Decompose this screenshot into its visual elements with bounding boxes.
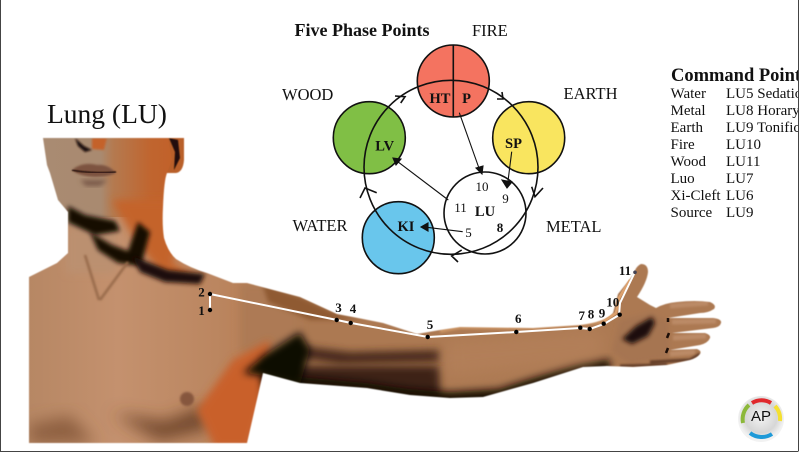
- wood circle: [333, 102, 405, 174]
- diagram heading: Five Phase Points: [294, 20, 430, 40]
- five phase diagram: [282, 20, 618, 274]
- table rows: LU11: [726, 154, 760, 170]
- armpit shadow: [243, 332, 310, 385]
- table rows: LU9: [726, 205, 754, 221]
- arrows between circles: [393, 113, 512, 232]
- lung point numbers: 9: [502, 191, 509, 206]
- face tone: [44, 138, 184, 217]
- body illustration: head, torso and arm: [20, 130, 733, 450]
- table rows: Source: [670, 205, 712, 221]
- lung point numbers: 11: [454, 200, 467, 215]
- title: Lung (LU): [47, 98, 167, 129]
- earth circle: [493, 102, 565, 174]
- table rows: Xi-Cleft: [670, 188, 721, 204]
- right frame mask: [798, 0, 800, 453]
- bold element labels: SP: [505, 136, 522, 152]
- ear: [170, 139, 184, 172]
- table rows: LU10: [726, 137, 761, 153]
- neck tone: [99, 234, 104, 237]
- table rows: [670, 86, 800, 221]
- lung point numbers: 10: [476, 179, 488, 194]
- nipple: [180, 392, 194, 406]
- meridian line with acupoints: 5: [427, 317, 434, 332]
- phase labels: WATER: [292, 216, 348, 235]
- meridian line with acupoints: 1: [198, 303, 205, 318]
- generating cycle ring with arrowheads: [360, 80, 543, 262]
- meridian line with acupoints: 2: [198, 284, 205, 300]
- meridian line with acupoints: [198, 263, 637, 339]
- phase labels: [282, 21, 618, 236]
- bold element labels: [375, 91, 522, 235]
- hand detail: [612, 303, 716, 366]
- meridian line with acupoints: 7: [578, 308, 585, 323]
- table rows: Earth: [670, 120, 703, 136]
- table rows: LU6: [726, 188, 754, 204]
- meridian line with acupoints: 4: [350, 301, 357, 316]
- fire circle: [417, 45, 489, 117]
- table rows: LU7: [726, 171, 754, 187]
- meridian line with acupoints: 6: [515, 311, 522, 326]
- table rows: LU8 Horary: [726, 103, 800, 119]
- command points table: [670, 66, 800, 221]
- bold element labels: LV: [375, 138, 395, 154]
- table rows: Water: [670, 86, 706, 102]
- nose and lips: [72, 138, 116, 186]
- icon: AP logo: [738, 396, 784, 442]
- water circle: [362, 202, 434, 274]
- table rows: Wood: [670, 154, 706, 170]
- lung circle: [444, 172, 526, 254]
- bold element labels: LU: [475, 204, 496, 220]
- chest shading: [29, 416, 95, 443]
- table rows: Fire: [670, 137, 695, 153]
- phase labels: FIRE: [472, 21, 508, 40]
- bold element labels: P: [462, 91, 471, 107]
- phase labels: WOOD: [282, 85, 333, 104]
- neck and jaw shadows: [68, 206, 120, 235]
- meridian line with acupoints: 9: [599, 305, 606, 320]
- icon: AP logo: AP: [751, 408, 771, 425]
- meridian line with acupoints: 8: [588, 307, 595, 322]
- meridian line with acupoints: 10: [606, 294, 619, 310]
- meridian line with acupoints: 11: [619, 263, 631, 278]
- phase labels: EARTH: [564, 84, 618, 103]
- bold element labels: KI: [398, 219, 415, 235]
- table rows: Luo: [670, 171, 695, 187]
- meridian line with acupoints: 3: [335, 300, 342, 315]
- lung point numbers: 8: [497, 220, 504, 235]
- lung point numbers: 5: [465, 225, 472, 240]
- lung point numbers: [454, 179, 509, 240]
- table rows: Metal: [670, 103, 706, 119]
- bold element labels: HT: [430, 91, 451, 107]
- arm shading: [262, 288, 354, 322]
- phase labels: METAL: [546, 217, 602, 236]
